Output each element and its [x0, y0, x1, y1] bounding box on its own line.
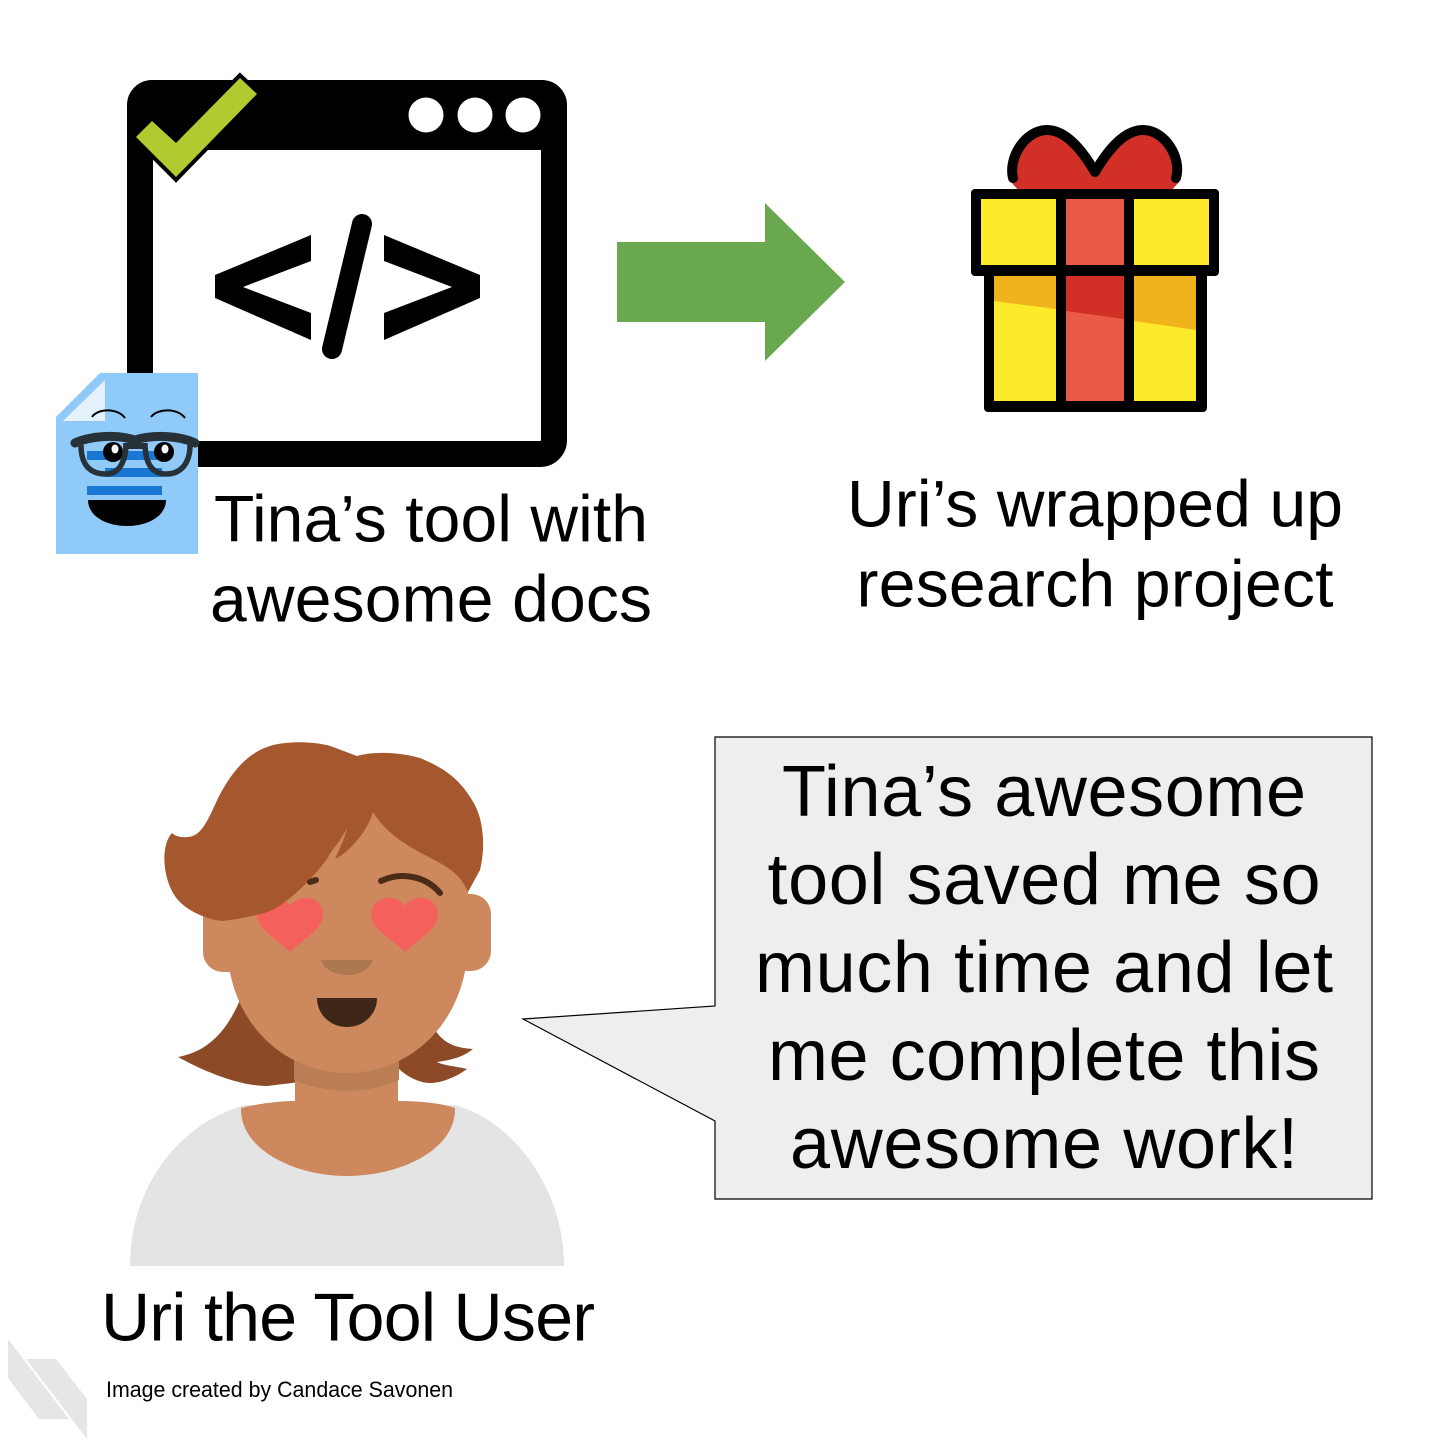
bubble text: Tina’s awesome	[782, 752, 1306, 832]
back hair	[178, 1000, 473, 1086]
caption: wrapped up research project	[847, 466, 1343, 620]
bubble text	[755, 752, 1333, 1184]
front hair	[164, 742, 483, 921]
caption: Uri the Tool User: Uri the Tool User	[101, 1280, 595, 1356]
mouth	[317, 998, 377, 1027]
neck	[295, 1040, 398, 1110]
caption: Tina's tool	[210, 482, 652, 636]
caption: wrapped up research project: research project	[856, 546, 1334, 620]
image credit: Image created by Candace Savonen	[106, 1377, 453, 1402]
collar	[241, 1101, 455, 1176]
hearts	[257, 898, 438, 952]
caption: Tina's tool: Tina’s tool with	[214, 482, 648, 556]
caption: wrapped up research project: Uri’s wrapped up	[847, 466, 1343, 540]
shirt	[130, 1105, 564, 1266]
logo watermark	[8, 1339, 87, 1439]
bubble text: me complete this	[768, 1016, 1320, 1096]
head	[227, 800, 468, 1073]
eyebrows	[310, 876, 440, 893]
nose	[321, 960, 373, 975]
icon: wrapped gift	[971, 130, 1219, 412]
icon: code window	[127, 80, 567, 454]
bubble text: much time and let	[755, 928, 1333, 1008]
illustration: Uri the tool user	[130, 742, 564, 1266]
icon: document mascot with glasses	[56, 373, 198, 554]
icon: green check mark	[136, 78, 257, 177]
ears	[203, 880, 491, 972]
bubble text: awesome work!	[790, 1104, 1298, 1184]
speech bubble	[523, 737, 1372, 1199]
bubble text: tool saved me so	[768, 840, 1320, 920]
caption: Tina's tool: awesome docs	[210, 562, 652, 636]
arrow	[617, 203, 845, 361]
neck shadow	[294, 1050, 399, 1090]
